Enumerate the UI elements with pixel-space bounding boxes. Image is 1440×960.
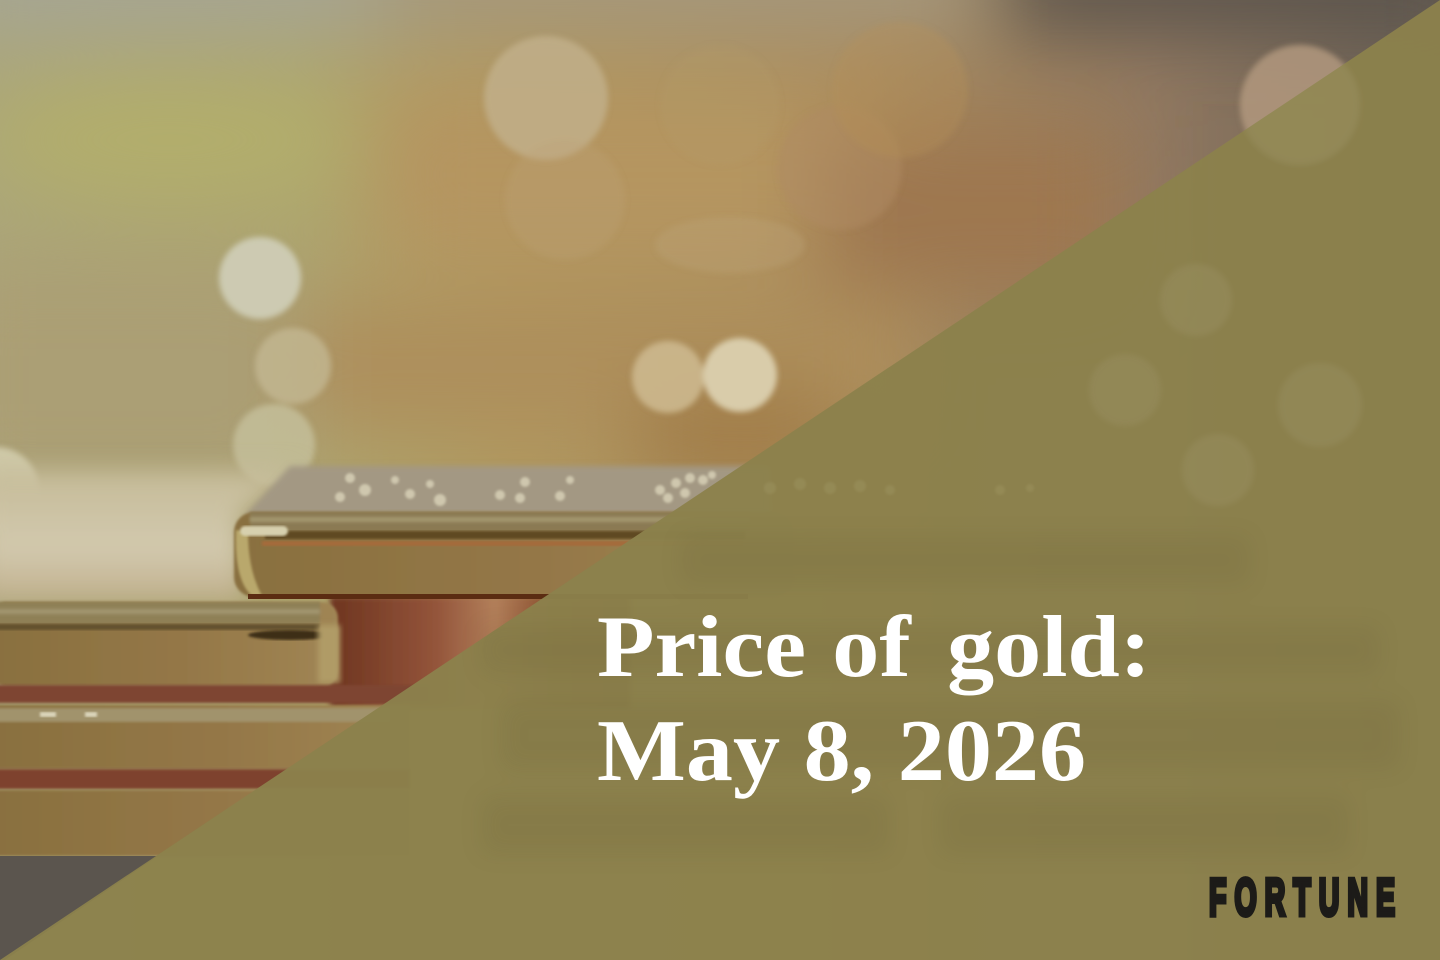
logo: FORTUNE wordmark: FORTUNE [1208, 868, 1403, 926]
title: May 8, 2026 [597, 703, 1086, 800]
faint details under overlay [480, 45, 1400, 855]
title [597, 599, 1151, 800]
gold bars [0, 466, 794, 960]
title: Price of gold: [597, 599, 1151, 696]
bokeh lights [0, 22, 1360, 533]
